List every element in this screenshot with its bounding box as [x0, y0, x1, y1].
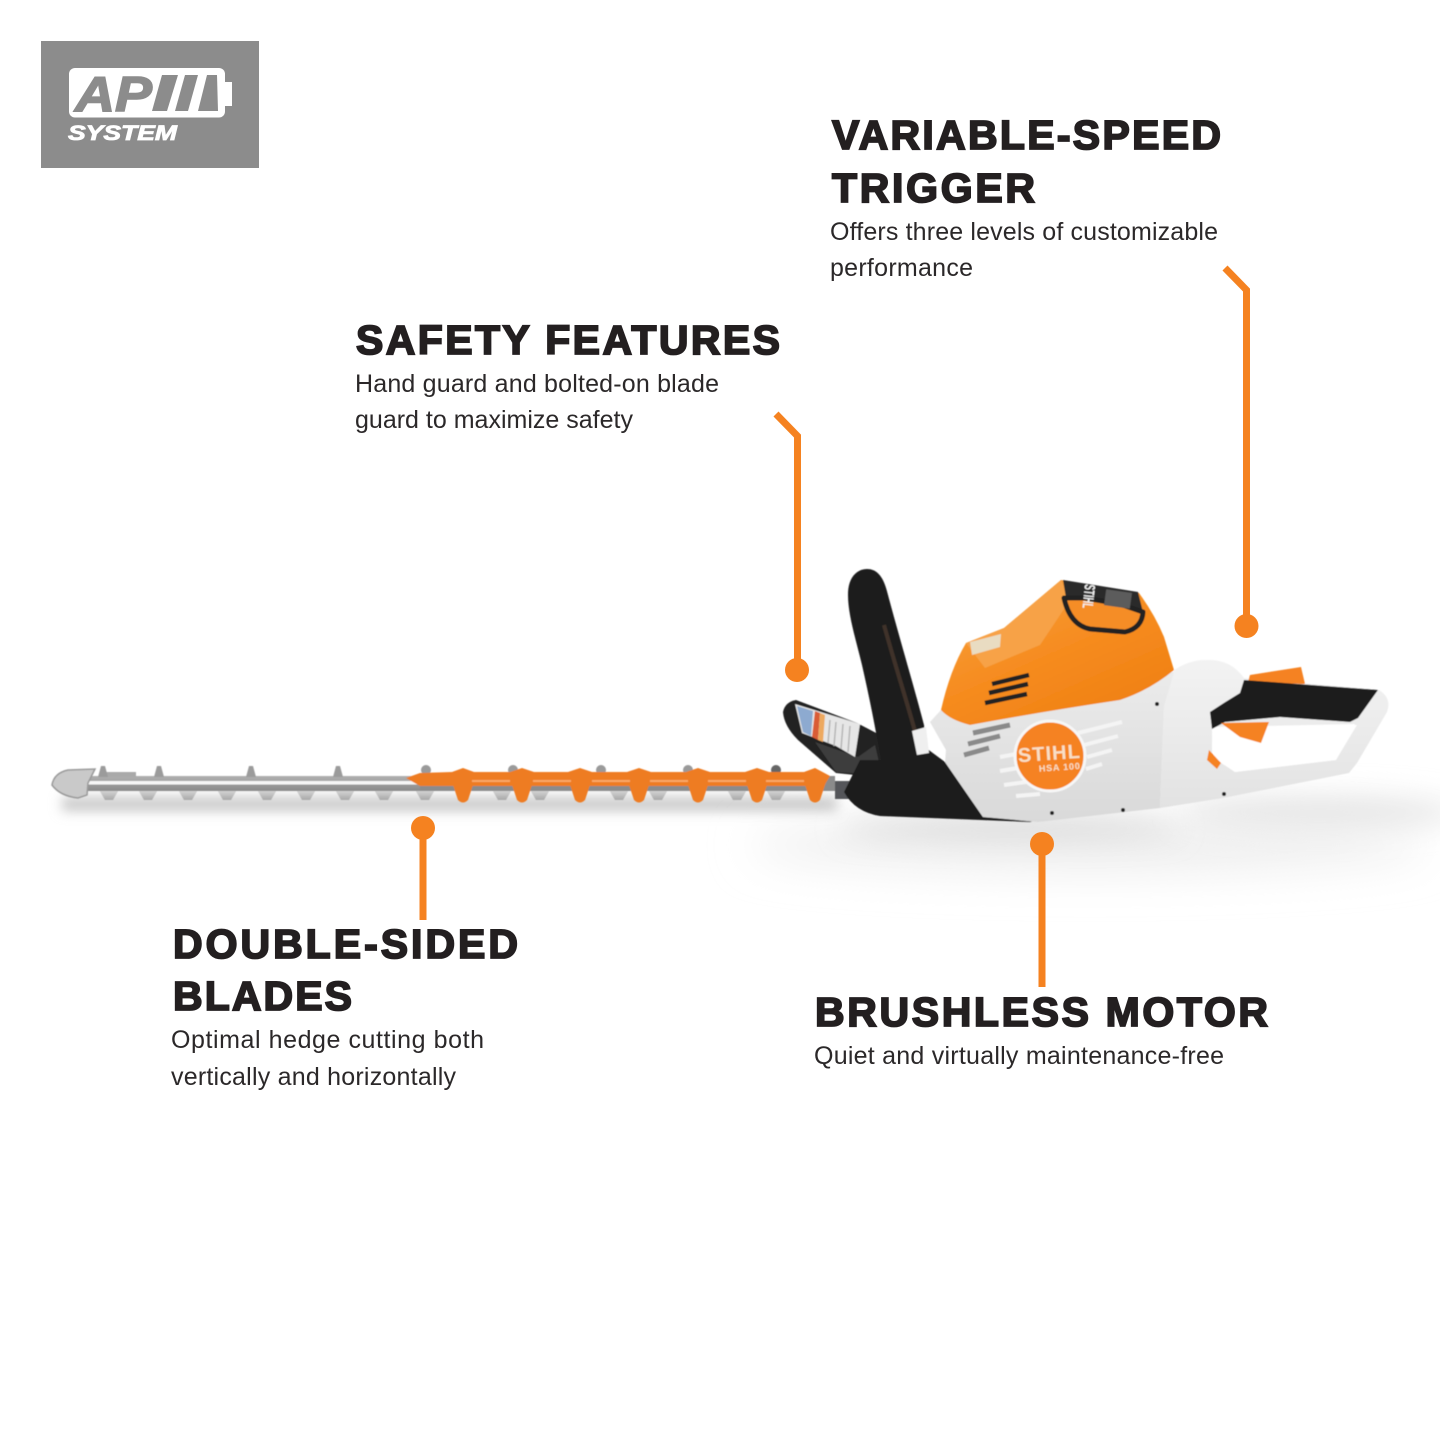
- grip: black: [1210, 680, 1378, 729]
- badge: STIHL HSA 100: [1015, 721, 1085, 791]
- blade: grey rail under orange section: [420, 776, 835, 791]
- text: safety description: guard to maximize safety: [355, 406, 634, 434]
- callout: brushless motor: [814, 989, 1268, 1070]
- bow inner shading: [884, 625, 916, 735]
- text: motor description: Quiet and virtually maintenance-free: [814, 1042, 1224, 1070]
- blade tip: [52, 769, 95, 798]
- heading: double-sided blades: [173, 921, 518, 1019]
- callout: double-sided blades: [171, 921, 518, 1091]
- blade: orange section: [406, 768, 830, 802]
- housing screws: [1050, 702, 1226, 815]
- housing grille: [1000, 722, 1122, 796]
- heading: safety features: SAFETY FEATURES: [356, 317, 780, 363]
- logo text: SYSTEM: SYSTEM: [68, 122, 178, 145]
- bolts: orange section: [421, 765, 781, 775]
- battery cover: orange: [941, 580, 1174, 725]
- lever: small orange: [1207, 750, 1221, 769]
- heading: variable-speed trigger: [832, 112, 1221, 211]
- leader: brushless motor: [1030, 832, 1054, 987]
- icon: battery outline: [69, 68, 232, 118]
- product: cordless hedge trimmer: [52, 569, 1388, 822]
- leader: safety features: [776, 414, 809, 682]
- heading: double-sided blades: BLADES: [173, 973, 352, 1019]
- product shadow: [62, 796, 1440, 869]
- trigger: lower orange: [1221, 722, 1269, 743]
- blade: silver front section: [52, 766, 865, 799]
- leader: double-sided blades: [411, 816, 435, 920]
- housing vents: [964, 725, 1010, 755]
- rear handle body: [1160, 660, 1388, 808]
- heading: variable-speed trigger: TRIGGER: [832, 165, 1035, 211]
- heading: brushless motor: BRUSHLESS MOTOR: [815, 989, 1268, 1035]
- motor base: black: [844, 745, 1038, 822]
- bolts: top row: [98, 766, 343, 777]
- text: variable-speed description: [830, 218, 1218, 282]
- text: blades description: [171, 1026, 484, 1091]
- text: variable-speed description: performance: [830, 254, 973, 282]
- hand guard label: [795, 704, 860, 757]
- rear handle opening: [1212, 724, 1355, 772]
- teeth: silver: [98, 788, 787, 800]
- trigger: upper orange: [1248, 667, 1305, 684]
- motor housing: light grey: [930, 672, 1174, 822]
- front handle bow: black: [848, 569, 931, 798]
- battery brand text: STIHL: [1079, 584, 1098, 609]
- text: blades description: Optimal hedge cutting both: [171, 1026, 484, 1054]
- text: safety description: Hand guard and bolted-on blade: [355, 370, 719, 398]
- warning labels: [970, 634, 1001, 655]
- badge text: STIHL: STIHL: [1017, 741, 1081, 767]
- logo: AP System badge: [41, 41, 259, 168]
- text: blades description: vertically and horizontally: [171, 1063, 456, 1091]
- logo text: AP: AP: [74, 68, 152, 122]
- bow clip: [912, 727, 929, 755]
- battery pack: [1063, 580, 1143, 632]
- badge text: model: HSA 100: [1039, 761, 1080, 774]
- heading: variable-speed trigger: VARIABLE-SPEED: [832, 112, 1221, 158]
- callout: safety features: [355, 317, 780, 434]
- hand guard: [783, 700, 884, 778]
- text: safety description: [355, 370, 719, 434]
- motor vents: black: [985, 675, 1029, 703]
- cover highlight: [966, 580, 1070, 668]
- callout: variable-speed trigger: [830, 112, 1221, 282]
- leader: variable-speed trigger: [1225, 268, 1258, 638]
- heading: double-sided blades: DOUBLE-SIDED: [173, 921, 518, 967]
- text: variable-speed description: Offers three levels of customizable: [830, 218, 1218, 246]
